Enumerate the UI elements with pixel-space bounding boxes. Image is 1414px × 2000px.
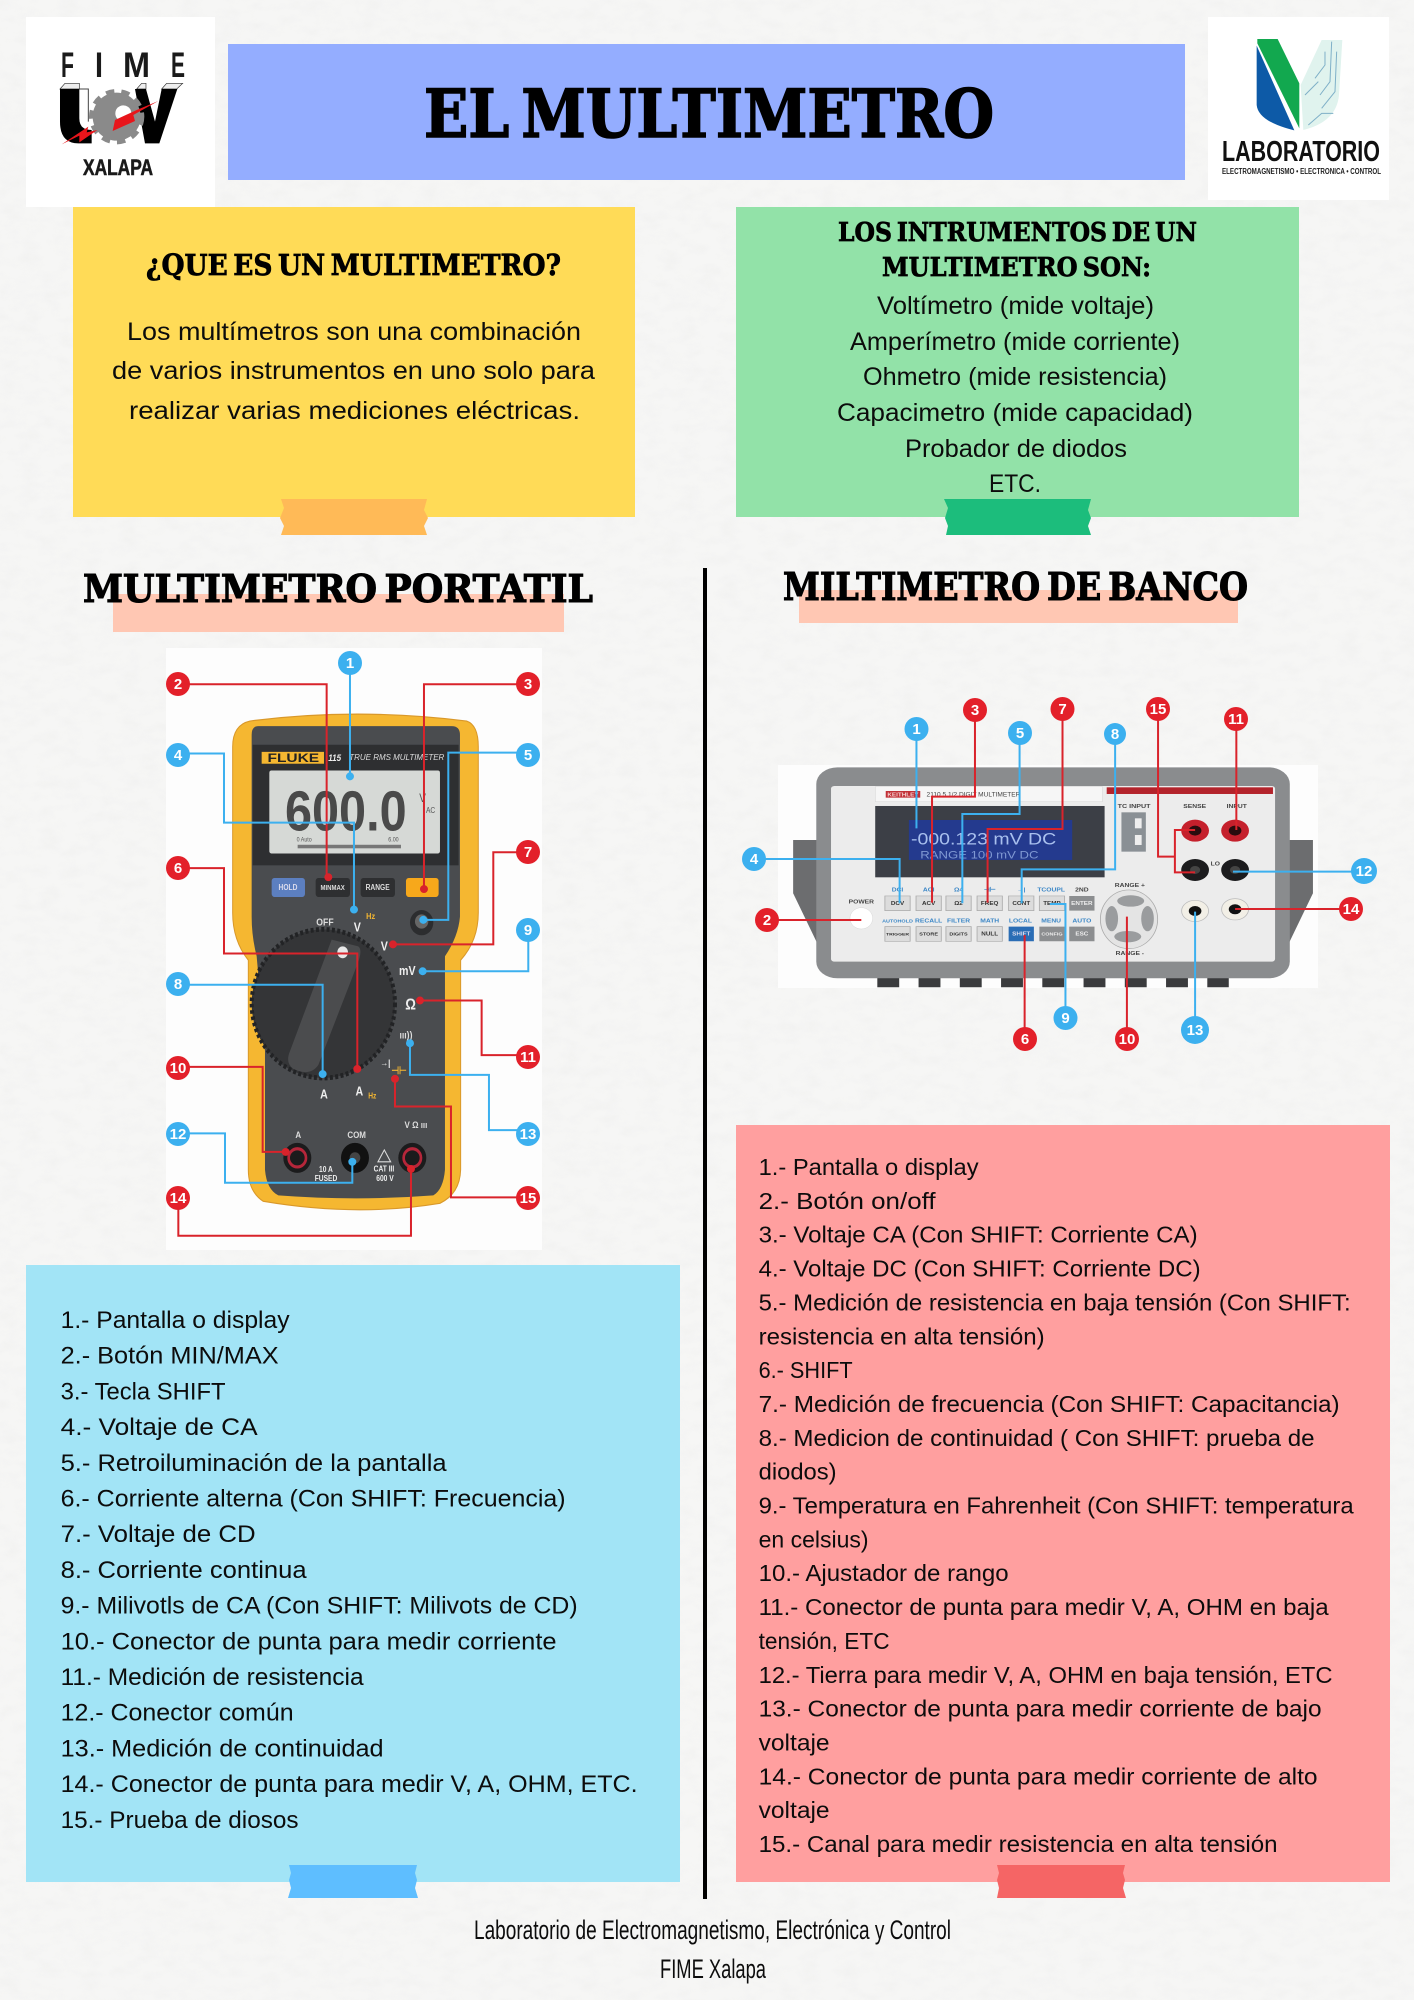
text block: portable list: 2.- Botón MIN/MAX xyxy=(61,1343,279,1370)
number markers: bench: 12 xyxy=(1356,863,1372,880)
text block: bench list: 5.- Medición de resistencia en baja tensión (Con SHIFT: xyxy=(759,1289,1351,1315)
diagram: portable multimeter: V xyxy=(381,939,388,954)
diagram: bench multimeter: FILTER xyxy=(947,919,971,924)
text block: bench list xyxy=(759,1154,1354,1857)
diagram: portable multimeter: ⊣⊢ xyxy=(391,1065,407,1077)
logo: FIME UV Xalapa: I xyxy=(95,46,103,85)
text block: instrument list: Voltímetro (mide voltaje) xyxy=(877,292,1154,320)
diagram: bench multimeter: DCV xyxy=(891,901,904,907)
number markers: portable: 13 xyxy=(520,1126,536,1143)
diagram: bench multimeter: Ω2 xyxy=(954,901,963,907)
text block: bench list: 15.- Canal para medir resistencia en alta tensión xyxy=(759,1831,1278,1857)
diagram: portable multimeter xyxy=(166,648,542,1250)
text block: portable list: 5.- Retroiluminación de la pantalla xyxy=(61,1450,447,1477)
callout lines: blue xyxy=(755,730,1363,1030)
diagram: portable multimeter: A xyxy=(355,1085,364,1099)
diagram: portable multimeter: →| xyxy=(380,1057,390,1068)
text block: portable list: 7.- Voltaje de CD xyxy=(61,1521,256,1548)
diagram: bench multimeter: LO xyxy=(1211,862,1220,867)
heading: multimetro de banco: MILTIMETRO DE BANCO xyxy=(783,564,1248,609)
text block: bench list: 4.- Voltaje DC (Con SHIFT: Corriente DC) xyxy=(759,1256,1201,1282)
logo: FIME UV Xalapa: F xyxy=(61,46,74,85)
text block: bench list: 3.- Voltaje CA (Con SHIFT: Corriente CA) xyxy=(759,1222,1198,1248)
diagram: portable multimeter: 600.0 xyxy=(285,781,407,844)
text block: portable list: 13.- Medición de continuidad xyxy=(61,1735,384,1762)
number markers: bench: 5 xyxy=(1016,725,1024,742)
diagram: portable multimeter: 10 A xyxy=(319,1165,334,1174)
number markers: portable: 14 xyxy=(170,1190,187,1207)
number markers: portable: 1 xyxy=(346,655,354,672)
callout lines: blue xyxy=(178,663,528,1183)
diagram: bench multimeter: ACI xyxy=(923,888,935,893)
number markers: bench: 7 xyxy=(1058,701,1067,718)
text block: instrument list: Amperímetro (mide corriente) xyxy=(850,328,1180,356)
text block: instrument list: ETC. xyxy=(989,470,1041,498)
text block: portable list xyxy=(61,1307,638,1834)
diagram: bench multimeter: KEITHLEY xyxy=(887,793,919,798)
logo: FIME UV Xalapa: XALAPA xyxy=(83,155,153,180)
footer credit: FIME Xalapa xyxy=(660,1954,767,1984)
number markers: portable: 10 xyxy=(170,1060,186,1077)
footer credit xyxy=(474,1915,951,1984)
number markers: portable: 9 xyxy=(524,922,532,939)
number markers: bench xyxy=(742,697,1377,1051)
diagram: bench multimeter: ESC xyxy=(1075,932,1088,937)
title banner: EL MULTIMETRO xyxy=(424,75,994,153)
diagram: bench multimeter: -000.123 mV DC xyxy=(911,830,1056,849)
center divider xyxy=(703,568,707,1899)
number markers: bench: 9 xyxy=(1061,1010,1070,1027)
number markers: portable xyxy=(166,651,540,1210)
diagram: bench multimeter: POWER xyxy=(849,900,875,905)
title banner xyxy=(228,44,1185,180)
text block: bench list: resistencia en alta tensión) xyxy=(759,1323,1045,1349)
text block: bench list: voltaje xyxy=(759,1797,830,1823)
diagram: bench multimeter: RECALL xyxy=(915,919,943,924)
diagram: bench multimeter: RANGE 100 mV DC xyxy=(920,849,1039,861)
diagram: bench multimeter: Ω4 xyxy=(954,888,964,893)
number markers: bench: 2 xyxy=(763,912,771,929)
number markers: portable: 3 xyxy=(524,676,532,693)
text block: portable list: 4.- Voltaje de CA xyxy=(61,1414,258,1441)
diagram: bench multimeter: CONFIG xyxy=(1041,932,1063,937)
text block: bench list: en celsius) xyxy=(759,1526,869,1552)
text block: portable list: 12.- Conector común xyxy=(61,1700,294,1727)
logo: FIME UV Xalapa xyxy=(26,17,215,207)
heading: multimetro portatil xyxy=(83,566,593,632)
heading: multimetro de banco xyxy=(783,564,1248,623)
logo: FIME UV Xalapa: E xyxy=(171,46,185,85)
footer credit: Laboratorio de Electromagnetismo, Electrónica y Control xyxy=(474,1915,951,1945)
diagram: portable multimeter: mV xyxy=(399,964,416,978)
diagram: bench multimeter: INPUT xyxy=(1227,804,1247,810)
number markers: bench: 4 xyxy=(750,851,759,868)
diagram: bench multimeter: ENTER xyxy=(1071,901,1093,907)
diagram: portable multimeter: TRUE RMS MULTIMETER xyxy=(349,753,445,762)
diagram: bench multimeter: DCI xyxy=(892,888,904,893)
heading: que es: ¿QUE ES UN MULTIMETRO? xyxy=(146,248,561,282)
number markers: portable: 11 xyxy=(520,1049,536,1066)
panel: que es un multimetro xyxy=(73,207,635,535)
logo: Laboratorio xyxy=(1208,17,1389,200)
text block: bench list: 8.- Medicion de continuidad ( Con SHIFT: prueba de xyxy=(759,1425,1315,1451)
text block: bench list: 7.- Medición de frecuencia (Con SHIFT: Capacitancia) xyxy=(759,1391,1340,1417)
diagram: portable multimeter: V xyxy=(419,792,427,805)
text block: instrument list: Capacimetro (mide capacidad) xyxy=(837,399,1193,427)
number markers: bench: 1 xyxy=(912,721,921,738)
text block: definition: realizar varias mediciones eléctricas. xyxy=(129,397,580,425)
diagram: bench multimeter: LOCAL xyxy=(1009,919,1032,924)
diagram: bench multimeter: STORE xyxy=(919,932,939,937)
text block: portable list: 1.- Pantalla o display xyxy=(61,1307,290,1334)
diagram: portable multimeter: Hz xyxy=(366,912,375,921)
number markers: bench: 11 xyxy=(1228,711,1244,728)
diagram: bench multimeter: AUTOHOLD xyxy=(882,919,913,924)
diagram: bench multimeter: CONT xyxy=(1012,901,1031,907)
diagram: bench multimeter xyxy=(742,697,1377,1051)
diagram: bench multimeter: TEMP xyxy=(1043,901,1061,907)
callout lines: red xyxy=(767,709,1351,1039)
diagram: bench multimeter: SENSE xyxy=(1183,804,1206,810)
diagram: bench multimeter: SHIFT xyxy=(1012,932,1031,937)
diagram: bench multimeter: →| xyxy=(1017,888,1026,893)
panel: bench legend xyxy=(736,1125,1390,1898)
diagram: bench multimeter: ⊣⊢ xyxy=(984,886,996,893)
tape: yellow xyxy=(280,499,428,535)
text block: bench list: diodos) xyxy=(759,1459,837,1485)
text block: portable list: 9.- Milivotls de CA (Con SHIFT: Milivots de CD) xyxy=(61,1593,578,1620)
text block: definition: Los multímetros son una combinación xyxy=(127,318,581,346)
heading: instrumentos: MULTIMETRO SON: xyxy=(882,253,1151,283)
diagram: bench multimeter: AUTO xyxy=(1072,919,1092,924)
diagram: portable multimeter: 115 xyxy=(328,752,341,763)
text block: bench list: 11.- Conector de punta para medir V, A, OHM en baja xyxy=(759,1594,1329,1620)
text block: bench list: 1.- Pantalla o display xyxy=(759,1154,979,1180)
number markers: portable: 7 xyxy=(524,844,532,861)
diagram: bench multimeter: RANGE - xyxy=(1116,951,1144,957)
text block: bench list: 2.- Botón on/off xyxy=(759,1188,936,1214)
number markers: bench: 15 xyxy=(1150,701,1166,718)
diagram: bench multimeter: NULL xyxy=(981,932,999,937)
panel: instrumentos xyxy=(736,207,1299,535)
diagram: portable multimeter: 6.00 xyxy=(388,837,399,844)
diagram: portable multimeter: A xyxy=(295,1129,302,1140)
tape: green xyxy=(944,499,1091,535)
diagram: bench multimeter: ACV xyxy=(922,901,936,907)
diagram: bench multimeter: DIGITS xyxy=(949,932,968,937)
diagram: portable multimeter: V Ω ııı xyxy=(405,1120,427,1130)
text block: portable list: 10.- Conector de punta para medir corriente xyxy=(61,1628,557,1655)
diagram: portable multimeter: Ω xyxy=(405,997,416,1014)
tape: red xyxy=(997,1865,1126,1898)
number markers: bench: 8 xyxy=(1111,726,1119,743)
text block: portable list: 3.- Tecla SHIFT xyxy=(61,1378,226,1405)
number markers: bench: 14 xyxy=(1343,901,1360,918)
number markers: bench: 13 xyxy=(1187,1022,1203,1039)
number markers: portable: 6 xyxy=(174,860,182,877)
diagram: portable multimeter: A xyxy=(320,1088,328,1102)
diagram: portable multimeter: ııı)) xyxy=(399,1030,412,1042)
diagram: portable multimeter: RANGE xyxy=(366,882,390,892)
number markers: portable: 5 xyxy=(524,747,532,764)
text block: bench list: 14.- Conector de punta para medir corriente de alto xyxy=(759,1763,1318,1789)
diagram: bench multimeter: RANGE + xyxy=(1115,883,1145,889)
text block: instrument list: Ohmetro (mide resistencia) xyxy=(863,363,1167,391)
diagram: bench multimeter: 2ND xyxy=(1075,888,1089,893)
text block: bench list: 9.- Temperatura en Fahrenheit (Con SHIFT: temperatura xyxy=(759,1492,1354,1518)
number markers: portable: 15 xyxy=(520,1190,536,1207)
diagram: bench multimeter: TRIGGER xyxy=(886,932,910,937)
diagram: portable multimeter: V xyxy=(354,921,361,935)
diagram: bench multimeter: TCOUPL xyxy=(1037,888,1065,893)
diagram: portable multimeter: FLUKE xyxy=(267,752,319,765)
callout lines: red xyxy=(178,684,528,1236)
tape: blue xyxy=(288,1865,418,1898)
heading: instrumentos: LOS INTRUMENTOS DE UN xyxy=(838,218,1197,248)
diagram: portable multimeter: MINMAX xyxy=(320,884,345,892)
number markers: portable: 2 xyxy=(174,676,182,693)
diagram: portable multimeter: Hz xyxy=(368,1091,377,1101)
diagram: portable multimeter: 600 V xyxy=(376,1173,394,1183)
text block: portable list: 14.- Conector de punta para medir V, A, OHM, ETC. xyxy=(61,1771,638,1798)
diagram: bench multimeter: MENU xyxy=(1041,919,1062,924)
diagram: portable multimeter: HOLD xyxy=(279,882,297,892)
number markers: bench: 3 xyxy=(971,702,979,719)
diagram: portable multimeter: CAT III xyxy=(374,1164,394,1174)
text block: bench list: tensión, ETC xyxy=(759,1628,890,1654)
text block: bench list: 10.- Ajustador de rango xyxy=(759,1560,1009,1586)
text block: bench list: 12.- Tierra para medir V, A, OHM en baja tensión, ETC xyxy=(759,1662,1333,1688)
diagram: bench multimeter: FREQ xyxy=(981,901,999,907)
text block: portable list: 6.- Corriente alterna (Con SHIFT: Frecuencia) xyxy=(61,1486,566,1512)
text block: portable list: 8.- Corriente continua xyxy=(61,1557,307,1584)
diagram: portable multimeter: AC xyxy=(426,806,435,815)
heading: instrumentos xyxy=(838,218,1197,283)
diagram: bench multimeter: 2110 5 1/2 DIGIT MULTIMETER xyxy=(927,792,1020,798)
text block: definition: de varios instrumentos en uno solo para xyxy=(112,357,595,385)
diagram: bench multimeter: TC INPUT xyxy=(1118,804,1151,810)
text block: definition xyxy=(112,318,595,425)
text block: portable list: 11.- Medición de resistencia xyxy=(61,1664,364,1691)
diagram: portable multimeter: 0 Auto xyxy=(297,837,312,844)
text block: portable list: 15.- Prueba de diosos xyxy=(61,1807,299,1834)
number markers: portable: 4 xyxy=(174,747,183,764)
text block: bench list: 6.- SHIFT xyxy=(759,1357,853,1383)
panel: portable legend xyxy=(26,1265,680,1898)
number markers: bench: 6 xyxy=(1021,1031,1029,1048)
text block: instrument list xyxy=(837,292,1193,498)
text block: bench list: 13.- Conector de punta para medir corriente de bajo xyxy=(759,1696,1322,1722)
diagram: portable multimeter: OFF xyxy=(316,917,334,929)
logo: FIME UV Xalapa: M xyxy=(123,46,150,85)
text block: instrument list: Probador de diodos xyxy=(905,435,1127,463)
text block: bench list: voltaje xyxy=(759,1730,830,1756)
number markers: bench: 10 xyxy=(1119,1031,1135,1048)
diagram: bench multimeter: MATH xyxy=(980,919,999,924)
number markers: portable: 12 xyxy=(170,1126,186,1143)
heading: multimetro portatil: MULTIMETRO PORTATIL xyxy=(83,566,593,611)
diagram: portable multimeter: COM xyxy=(347,1129,366,1140)
number markers: portable: 8 xyxy=(174,976,182,993)
diagram: portable multimeter: FUSED xyxy=(315,1173,337,1183)
